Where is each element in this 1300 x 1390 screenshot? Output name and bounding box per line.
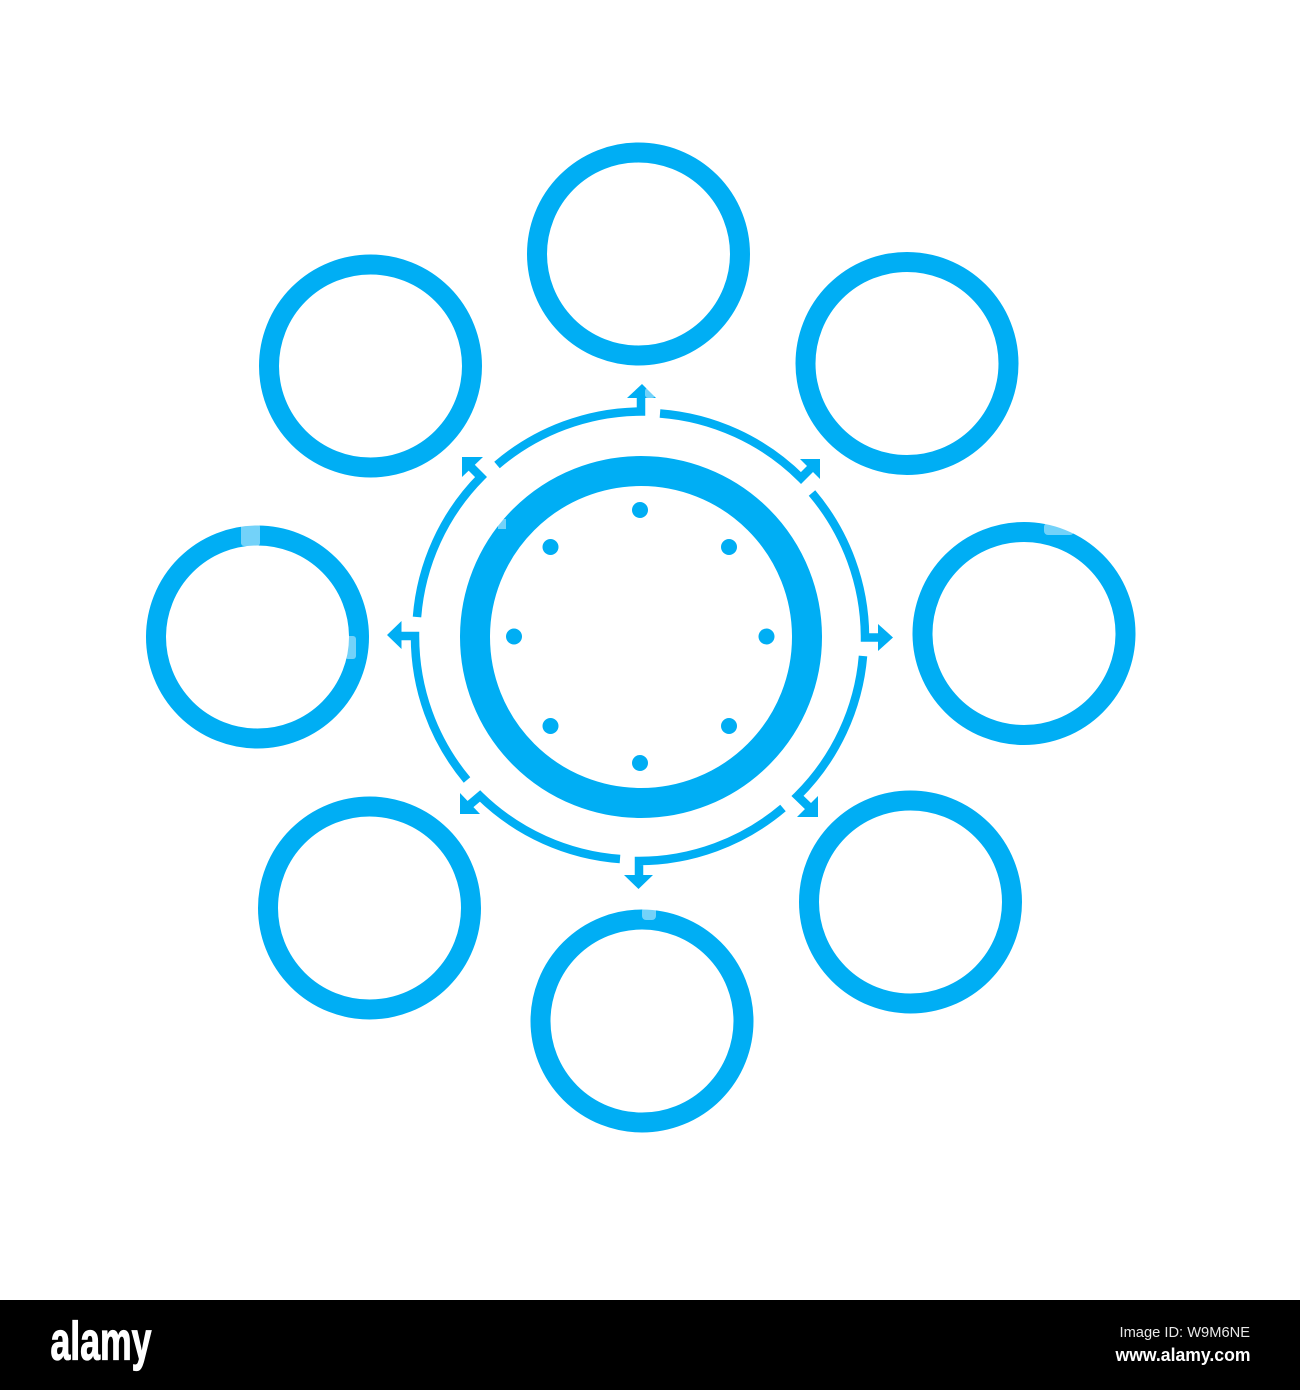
outer rings bbox=[156, 152, 1126, 1122]
footer logo: alamy bbox=[50, 1312, 152, 1372]
arrow: to top ring bbox=[497, 384, 656, 465]
ring: upper right bbox=[806, 262, 1008, 465]
circular arrows bbox=[387, 384, 893, 889]
arrow: to lower right ring bbox=[797, 656, 863, 817]
central dots bbox=[506, 502, 774, 771]
arrow: to left ring bbox=[387, 621, 467, 780]
ring: right bbox=[922, 532, 1126, 735]
footer bar bbox=[0, 1300, 1300, 1390]
arrow: to lower left ring bbox=[460, 793, 620, 859]
ring: left bbox=[156, 536, 359, 738]
website: www.alamy.com bbox=[1115, 1344, 1250, 1365]
ring: lower left bbox=[268, 806, 471, 1010]
ring: upper left bbox=[269, 264, 472, 468]
ring: top bbox=[537, 152, 740, 356]
image id: Image ID: W9M6NE bbox=[1120, 1324, 1250, 1341]
arrow: to upper right ring bbox=[660, 414, 820, 479]
arrow: to bottom ring bbox=[624, 808, 783, 889]
arrow: to upper left ring bbox=[417, 457, 483, 617]
ring: lower right bbox=[809, 800, 1012, 1004]
ring: bottom bbox=[540, 920, 744, 1122]
arrow: to right ring bbox=[812, 493, 893, 651]
central ring bbox=[475, 471, 807, 803]
